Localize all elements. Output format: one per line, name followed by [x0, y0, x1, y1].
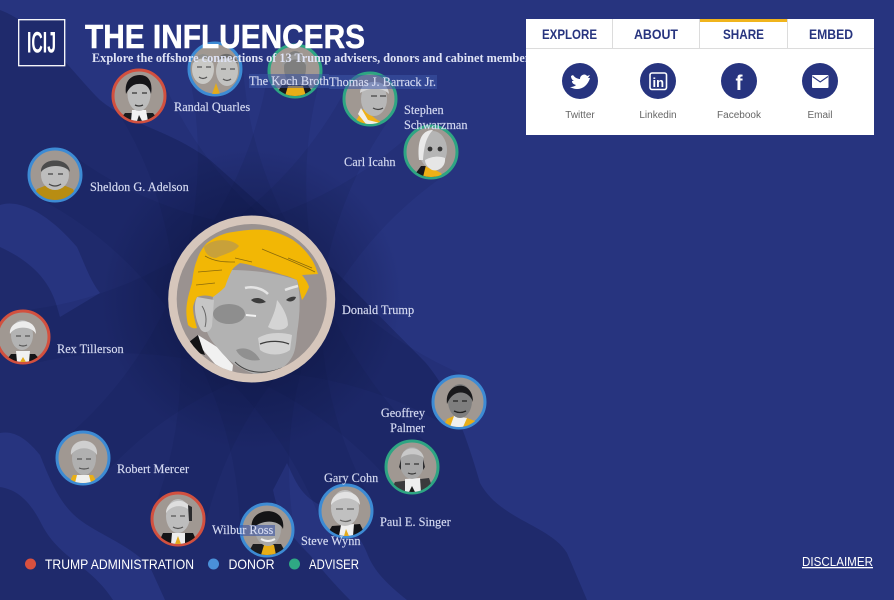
title: THE INFLUENCERS	[85, 18, 365, 55]
dark halo around Donald Trump	[102, 149, 402, 449]
label: Thomas J. Barrack Jr.: Thomas J. Barrack Jr.	[329, 75, 436, 89]
label: Wilbur Ross: Wilbur Ross	[212, 523, 274, 537]
label: email: Email	[807, 110, 833, 121]
label: Sheldon G. Adelson: Sheldon G. Adelson	[90, 180, 189, 194]
label: Geoffrey Palmer: Geoffrey	[381, 406, 425, 420]
portrait: Paul E. Singer	[320, 485, 372, 537]
label: Carl Icahn: Carl Icahn	[344, 155, 396, 169]
portrait: Thomas J. Barrack Jr.	[344, 73, 396, 125]
icon: linkedin	[640, 63, 676, 99]
label: Donald Trump: Donald Trump	[342, 303, 414, 317]
legend: ADVISER	[309, 556, 359, 572]
logo: ICIJ: ICIJ	[27, 26, 56, 60]
portrait: Robert Mercer	[57, 432, 109, 484]
label: facebook: Facebook	[717, 110, 762, 121]
icon: email	[802, 63, 838, 99]
link: disclaimer: DISCLAIMER	[802, 554, 873, 569]
portrait: Wilbur Ross	[152, 493, 204, 545]
label: linkedin: Linkedin	[639, 110, 677, 121]
panel: share menu	[526, 19, 874, 135]
tab: about: ABOUT	[634, 26, 678, 42]
label: The Koch Brothers: The Koch Brothers	[249, 74, 343, 88]
portrait: Gary Cohn	[386, 441, 438, 493]
label: Stephen Schwarzman: Schwarzman	[404, 118, 468, 132]
label: Rex Tillerson: Rex Tillerson	[57, 342, 124, 356]
tab: embed: EMBED	[809, 26, 853, 42]
portrait: Rex Tillerson	[0, 311, 49, 363]
label: twitter: Twitter	[565, 110, 595, 121]
icon: facebook	[721, 63, 757, 99]
label: Gary Cohn: Gary Cohn	[324, 471, 378, 485]
logo: ICIJ	[19, 20, 65, 66]
label: Geoffrey Palmer: Palmer	[390, 421, 425, 435]
icon: linkedin: in	[653, 75, 664, 90]
label: Steve Wynn: Steve Wynn	[301, 534, 360, 548]
portrait: Geoffrey Palmer	[433, 376, 485, 428]
label: Paul E. Singer: Paul E. Singer	[380, 515, 451, 529]
portrait: green adviser (top)	[269, 45, 321, 97]
portrait: Carl Icahn	[405, 126, 457, 178]
legend: TRUMP ADMINISTRATION	[45, 556, 194, 572]
portrait: Randal Quarles	[113, 70, 165, 122]
tab: share: SHARE	[723, 26, 764, 42]
legend: DONOR	[228, 556, 274, 572]
portrait: Donald Trump	[168, 216, 335, 382]
label: Robert Mercer: Robert Mercer	[117, 462, 189, 476]
icon: twitter	[562, 63, 598, 99]
label: Stephen Schwarzman: Stephen	[404, 103, 444, 117]
subtitle: Explore the offshore connections of 13 Trump advisers, donors and cabinet members	[92, 50, 535, 65]
legend	[25, 556, 359, 572]
portrait: The Koch Brothers	[189, 43, 241, 95]
connection beams to Donald Trump	[18, 66, 471, 532]
label: Randal Quarles: Randal Quarles	[174, 100, 250, 114]
portrait: Sheldon G. Adelson	[29, 149, 81, 201]
icon: facebook: f	[736, 72, 744, 95]
portrait: Steve Wynn	[241, 504, 293, 556]
tab: explore: EXPLORE	[542, 26, 597, 42]
